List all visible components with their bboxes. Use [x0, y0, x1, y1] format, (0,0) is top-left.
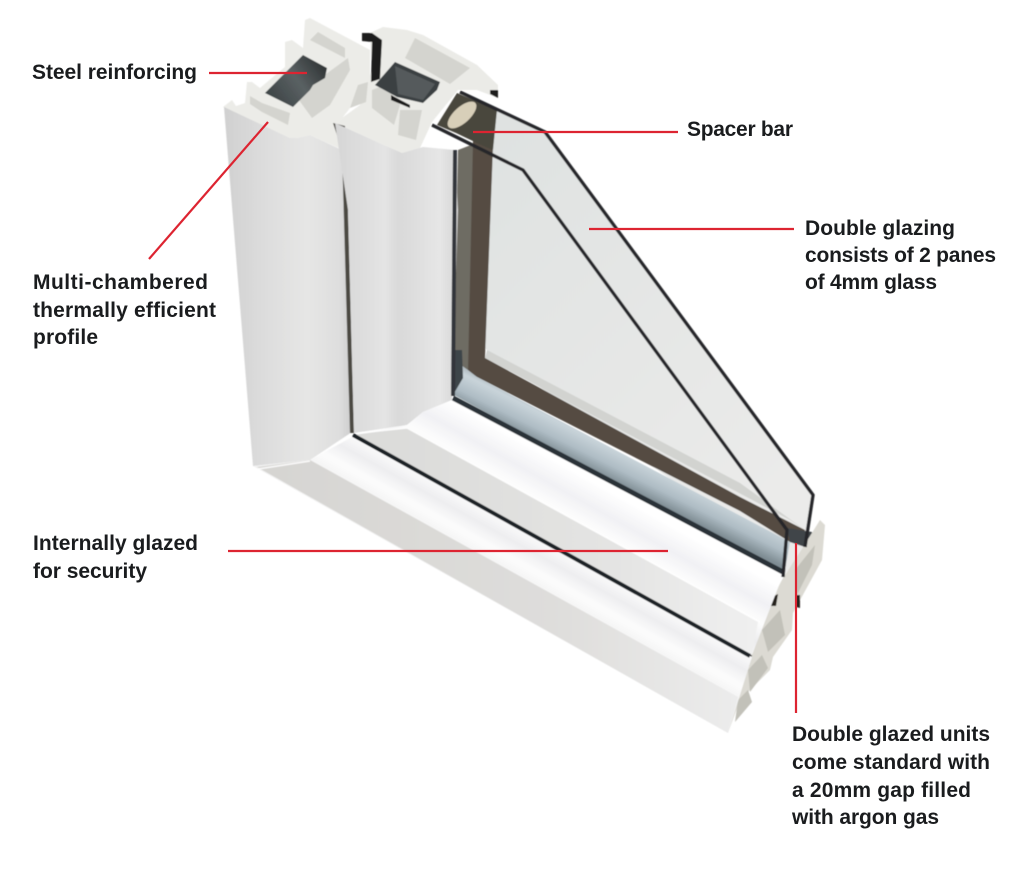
outer sill — [253, 437, 752, 733]
sealed unit dark strip and spacer — [437, 93, 815, 575]
steel reinforcing chamber — [265, 55, 327, 107]
glass panes — [460, 92, 813, 577]
label: spacer bar: Spacer bar — [687, 118, 793, 141]
red leader lines — [149, 73, 796, 713]
outer vertical frame member — [224, 107, 352, 466]
end cut dark clips — [746, 594, 800, 666]
sill mitre highlights — [258, 428, 760, 622]
label: double glazing: Double glazing — [805, 217, 955, 240]
window frame cutaway — [223, 18, 825, 733]
dark gasket clips — [362, 33, 498, 108]
gap between vertical members — [333, 123, 354, 433]
bottom cut end of frame — [728, 520, 825, 733]
second steel chamber — [375, 62, 440, 103]
label: multi-chambered profile: profile — [33, 326, 98, 349]
label: multi-chambered profile — [33, 271, 216, 349]
label: double glazing: of 4mm glass — [805, 271, 937, 294]
inner vertical frame member — [335, 123, 458, 433]
label: double glazing: consists of 2 panes — [805, 244, 996, 267]
upper section of inner frame — [335, 27, 498, 153]
label: internally glazed: Internally glazed — [33, 532, 198, 555]
profile chamber details — [250, 32, 470, 140]
glass pane edges — [432, 92, 813, 577]
label: multi-chambered profile: Multi-chambered — [33, 271, 208, 294]
label: internally glazed — [33, 532, 198, 583]
label: steel reinforcing: Steel reinforcing — [32, 61, 197, 84]
black gasket lines — [353, 150, 783, 656]
label: argon gap: a 20mm gap filled — [792, 779, 971, 802]
label: argon gap: with argon gas — [791, 806, 939, 829]
label: internally glazed: for security — [33, 560, 147, 583]
label: argon gap — [791, 723, 990, 829]
label: argon gap: come standard with — [792, 751, 990, 774]
label: multi-chambered profile: thermally efficient — [33, 299, 216, 322]
inner sill — [354, 400, 783, 655]
upper section of outer frame — [223, 18, 370, 150]
label: argon gap: Double glazed units — [792, 723, 990, 746]
label: double glazing — [805, 217, 996, 294]
